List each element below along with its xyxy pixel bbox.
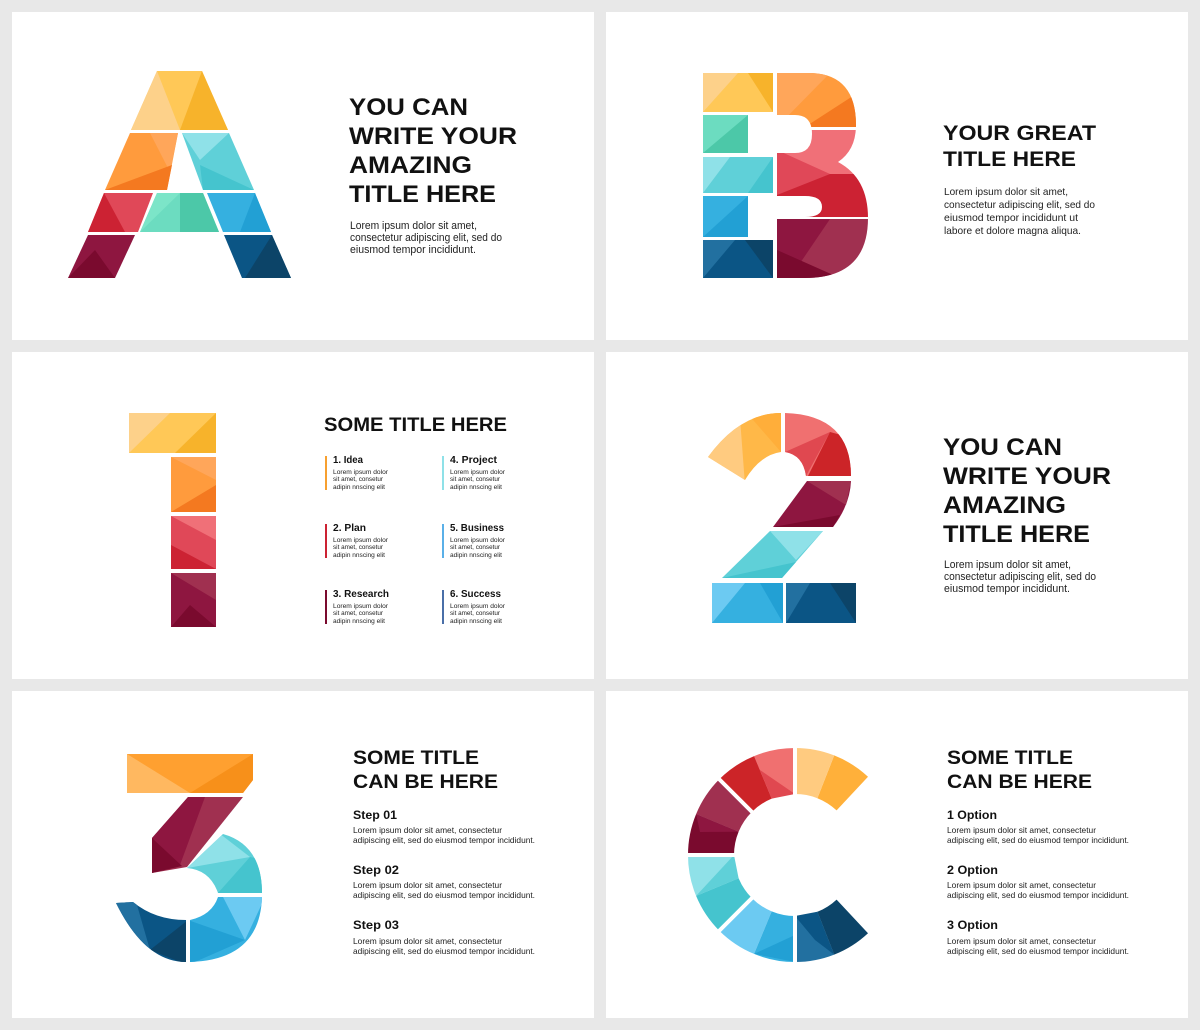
option 1: 1 Option xyxy=(947,810,997,822)
option 1: adipiscing elit, sed do eiusmod tempor incididunt. xyxy=(947,835,1129,845)
option 3: adipiscing elit, sed do eiusmod tempor incididunt. xyxy=(947,946,1129,956)
title C xyxy=(947,748,1092,793)
list item 1 Idea: adipin nnscing elit xyxy=(333,484,385,491)
title 3: SOME TITLE xyxy=(353,748,479,769)
number 3 graphic xyxy=(112,754,266,965)
title 3: CAN BE HERE xyxy=(353,772,498,793)
list item 6 Success xyxy=(442,589,506,625)
list item 1 Idea: 1. Idea xyxy=(333,455,363,466)
step 01: adipiscing elit, sed do eiusmod tempor incididunt. xyxy=(353,835,535,845)
step 03: Lorem ipsum dolor sit amet, consectetur xyxy=(353,936,502,946)
body text 2: eiusmod tempor incididunt. xyxy=(944,583,1070,595)
list item 4 Project xyxy=(442,455,506,491)
number 1 graphic xyxy=(129,413,216,627)
option 3 xyxy=(947,920,1129,956)
step 02: Step 02 xyxy=(353,865,399,877)
letter B graphic xyxy=(703,73,877,279)
step 01: Step 01 xyxy=(353,810,398,822)
body text A xyxy=(350,220,502,256)
title 2 xyxy=(943,434,1111,548)
title B xyxy=(943,122,1096,171)
title B: TITLE HERE xyxy=(943,148,1076,171)
title A: TITLE HERE xyxy=(349,181,496,208)
list item 6 Success: Lorem ipsum dolor xyxy=(450,603,506,610)
list item 2 Plan xyxy=(325,523,389,559)
list item 5 Business: Lorem ipsum dolor xyxy=(450,537,506,544)
list item 1 Idea: Lorem ipsum dolor xyxy=(333,469,389,476)
body text A: Lorem ipsum dolor sit amet, xyxy=(350,220,477,232)
option 1 xyxy=(947,810,1129,845)
letter A graphic xyxy=(68,71,291,278)
title 2: WRITE YOUR xyxy=(943,463,1111,490)
step 01 xyxy=(353,810,535,845)
number 2 graphic xyxy=(708,413,856,623)
option 2: 2 Option xyxy=(947,865,998,877)
list item 5 Business: sit amet, consetur xyxy=(450,544,501,551)
list item 6 Success: adipin nnscing elit xyxy=(450,618,502,625)
list item 3 Research: sit amet, consetur xyxy=(333,610,384,617)
step 02 xyxy=(353,865,535,900)
title 2: AMAZING xyxy=(943,492,1066,519)
list item 5 Business xyxy=(442,523,506,559)
list item 6 Success: sit amet, consetur xyxy=(450,610,501,617)
list item 1 Idea: sit amet, consetur xyxy=(333,476,384,483)
option 3: Lorem ipsum dolor sit amet, consectetur xyxy=(947,936,1096,946)
body text 2 xyxy=(944,559,1096,595)
option 1: Lorem ipsum dolor sit amet, consectetur xyxy=(947,825,1096,835)
title 2: YOU CAN xyxy=(943,434,1062,461)
title C: SOME TITLE xyxy=(947,748,1073,769)
title 3 xyxy=(353,748,498,793)
list item 4 Project: 4. Project xyxy=(450,455,498,466)
option 2: adipiscing elit, sed do eiusmod tempor incididunt. xyxy=(947,890,1129,900)
body text A: consectetur adipiscing elit, sed do xyxy=(350,232,502,244)
step 03: adipiscing elit, sed do eiusmod tempor incididunt. xyxy=(353,946,535,956)
panel: number 3 xyxy=(12,691,594,1018)
title B: YOUR GREAT xyxy=(943,122,1096,145)
step 02: adipiscing elit, sed do eiusmod tempor incididunt. xyxy=(353,890,535,900)
body text B: labore et dolore magna aliqua. xyxy=(944,225,1081,237)
list item 3 Research: Lorem ipsum dolor xyxy=(333,603,389,610)
panel: number 2 xyxy=(606,352,1188,679)
body text B: Lorem ipsum dolor sit amet, xyxy=(944,186,1068,198)
option 2 xyxy=(947,865,1129,900)
step 01: Lorem ipsum dolor sit amet, consectetur xyxy=(353,825,502,835)
list item 4 Project: sit amet, consetur xyxy=(450,476,501,483)
title A xyxy=(349,94,517,208)
list item 4 Project: adipin nnscing elit xyxy=(450,484,502,491)
list item 2 Plan: 2. Plan xyxy=(333,523,366,534)
list item 4 Project: Lorem ipsum dolor xyxy=(450,469,506,476)
list item 5 Business: adipin nnscing elit xyxy=(450,552,502,559)
panel: number 1 xyxy=(12,352,594,679)
list item 1 Idea xyxy=(325,455,389,491)
list item 2 Plan: sit amet, consetur xyxy=(333,544,384,551)
list item 5 Business: 5. Business xyxy=(450,523,504,534)
list item 6 Success: 6. Success xyxy=(450,589,501,600)
title A: WRITE YOUR xyxy=(349,123,517,150)
step 02: Lorem ipsum dolor sit amet, consectetur xyxy=(353,880,502,890)
title A: YOU CAN xyxy=(349,94,468,121)
body text A: eiusmod tempor incididunt. xyxy=(350,244,476,256)
list item 2 Plan: adipin nnscing elit xyxy=(333,552,385,559)
body text 2: consectetur adipiscing elit, sed do xyxy=(944,571,1096,583)
panel: letter B xyxy=(606,12,1188,340)
body text B: consectetur adipiscing elit, sed do xyxy=(944,199,1095,211)
title 2: TITLE HERE xyxy=(943,521,1090,548)
title C: CAN BE HERE xyxy=(947,772,1092,793)
panel: letter C xyxy=(606,691,1188,1018)
panel: letter A xyxy=(12,12,594,340)
title A: AMAZING xyxy=(349,152,472,179)
list item 3 Research: adipin nnscing elit xyxy=(333,618,385,625)
option 2: Lorem ipsum dolor sit amet, consectetur xyxy=(947,880,1096,890)
title 1: SOME TITLE HERE xyxy=(324,415,507,436)
list item 3 Research: 3. Research xyxy=(333,589,389,600)
list item 2 Plan: Lorem ipsum dolor xyxy=(333,537,389,544)
option 3: 3 Option xyxy=(947,920,998,932)
letter C graphic xyxy=(685,745,868,965)
body text 2: Lorem ipsum dolor sit amet, xyxy=(944,559,1071,571)
body text B xyxy=(944,186,1095,237)
step 03: Step 03 xyxy=(353,920,399,932)
list item 3 Research xyxy=(325,589,389,625)
body text B: eiusmod tempor incididunt ut xyxy=(944,212,1078,224)
step 03 xyxy=(353,920,535,956)
